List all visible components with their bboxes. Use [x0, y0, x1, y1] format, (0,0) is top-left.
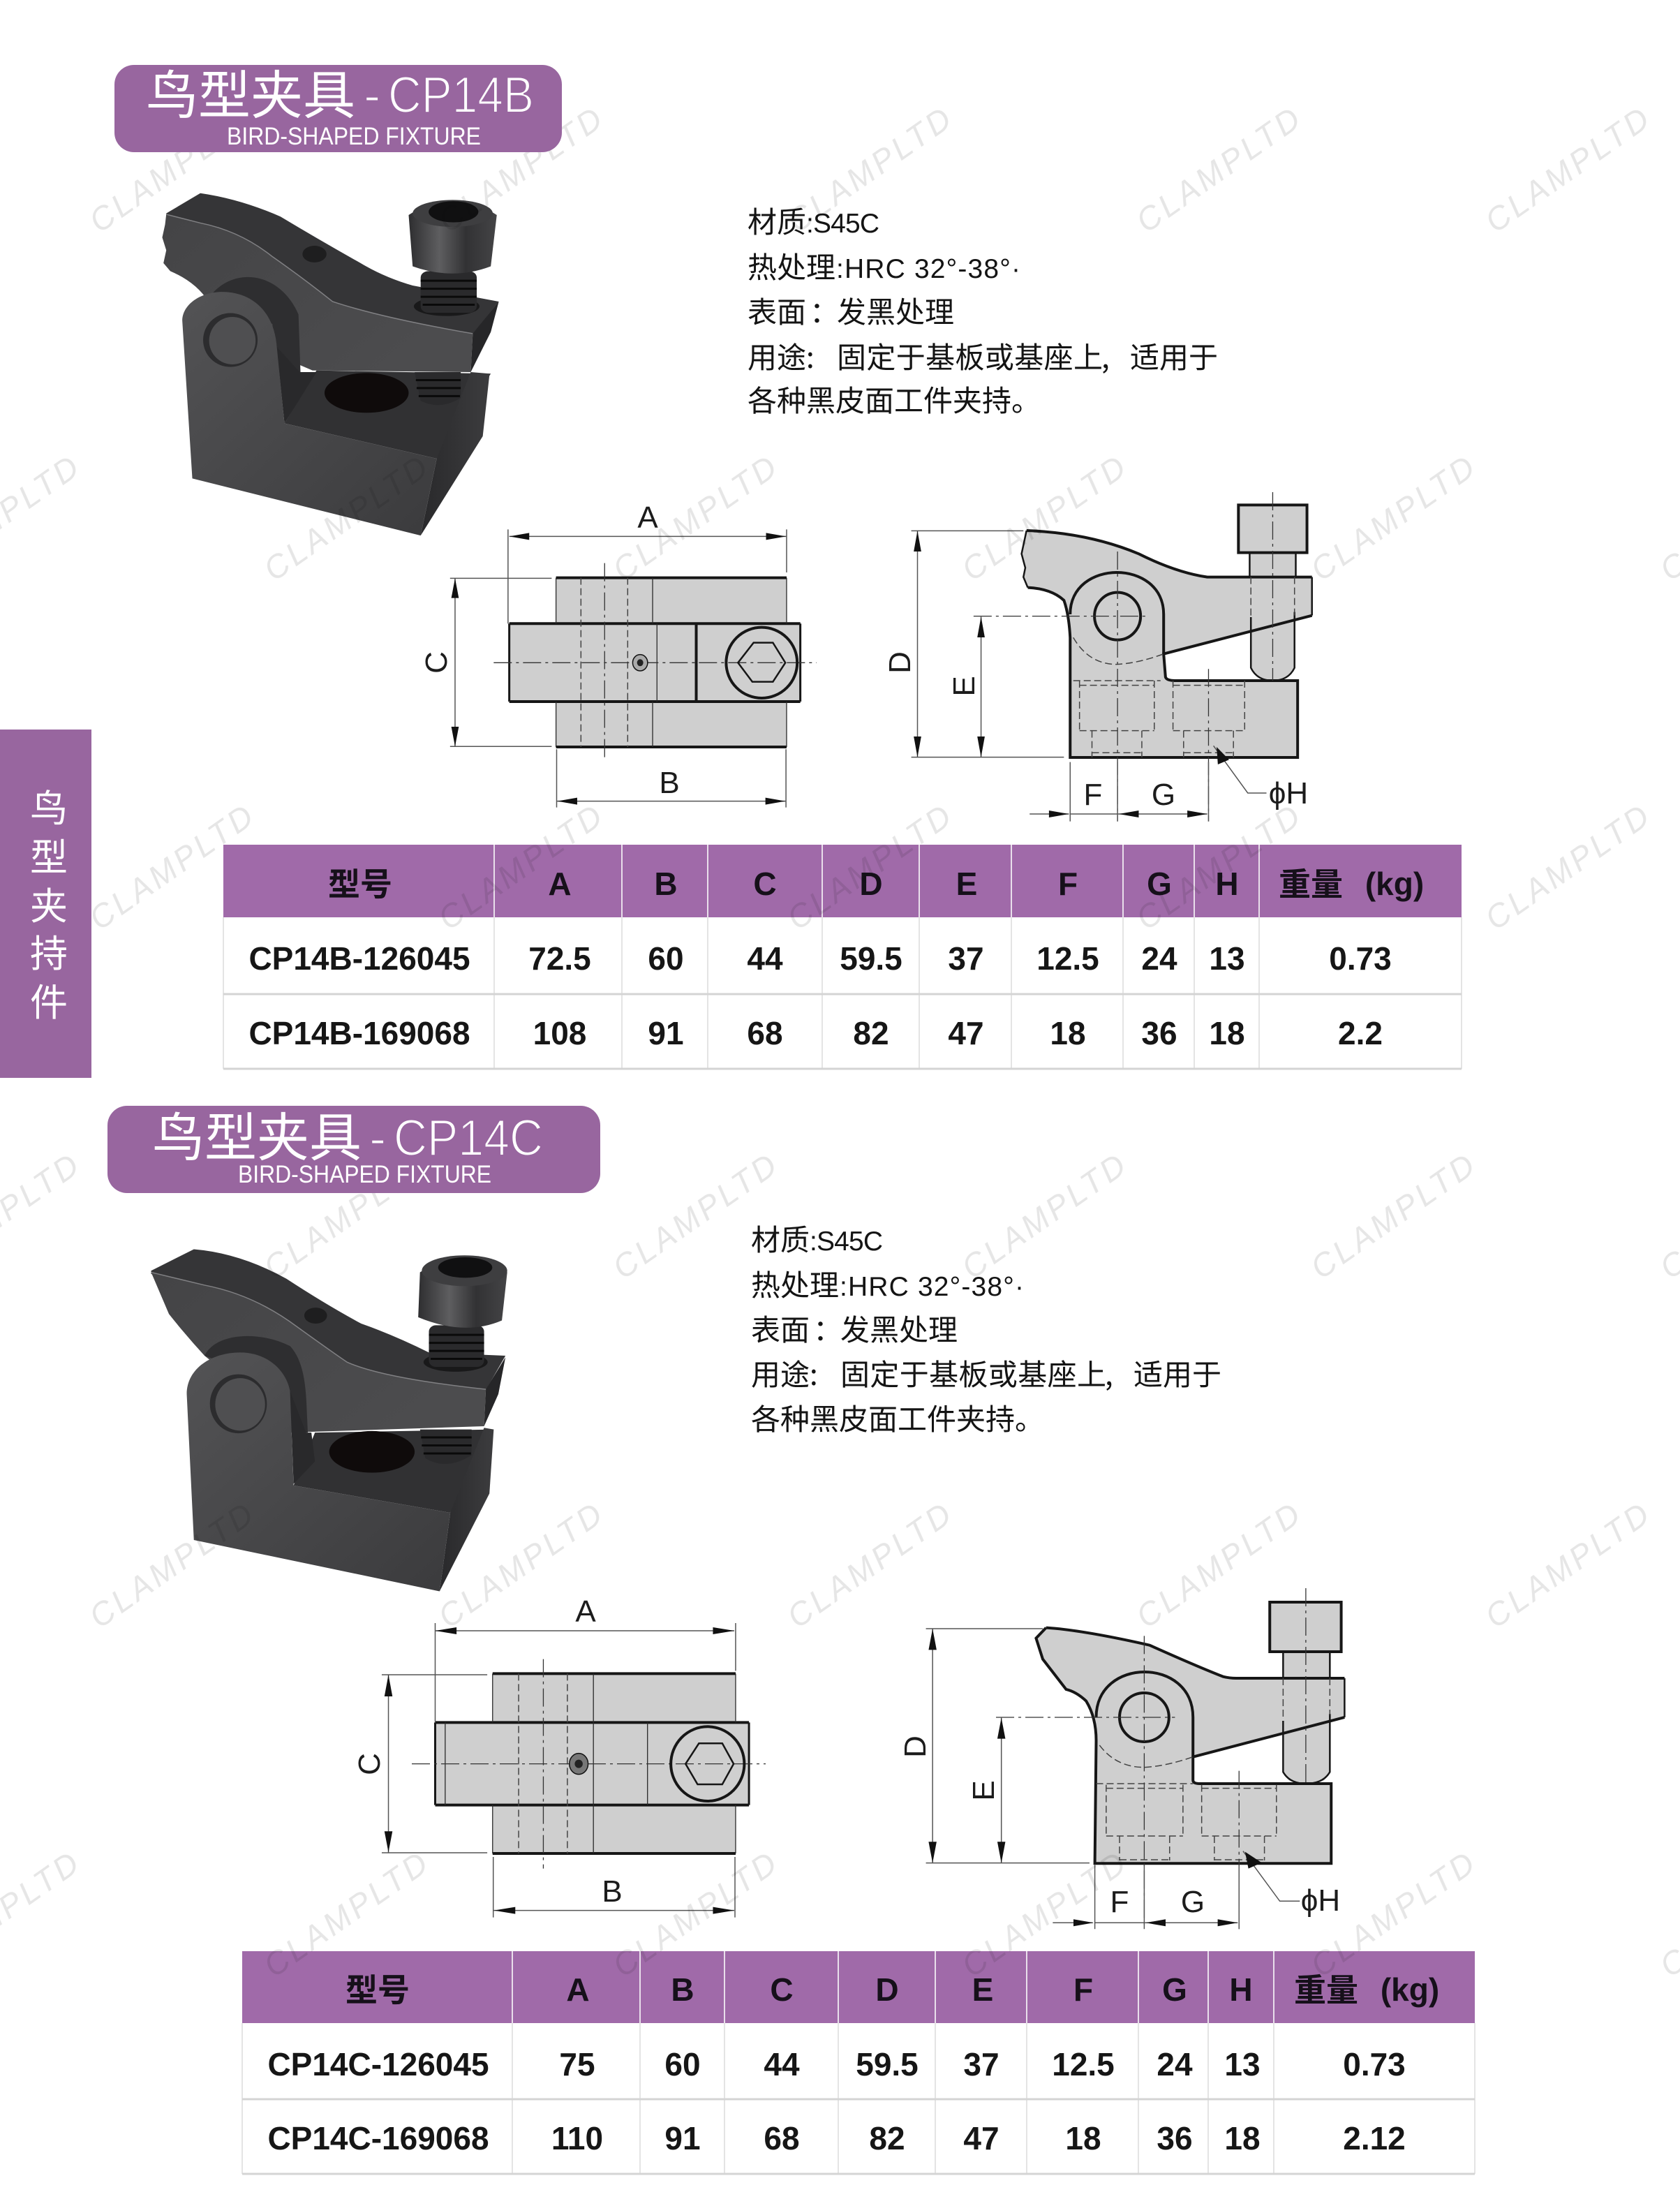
specification text: CP14B: [748, 199, 1218, 420]
table row: CP14B-126045: CP14B-126045: [248, 940, 470, 977]
table row: CP14B-126045: [248, 940, 1392, 977]
spec table: CP14C: [242, 1951, 1475, 2174]
title banner: CP14C: [107, 1095, 600, 1193]
technical drawing: CP14C side view: [926, 1588, 1344, 1929]
specification text: CP14C: ,: [1105, 1352, 1113, 1394]
specification text: CP14C: 材质: [751, 1217, 810, 1259]
watermark pattern: CLAMPLTD: [1478, 98, 1658, 239]
specification text: CP14C: :HRC 32°-38°·: [840, 1272, 1024, 1302]
table header row: B: [671, 1971, 694, 2008]
watermark pattern: CLAMPLTD: [1304, 447, 1484, 588]
side tab: category label: 鸟: [30, 778, 68, 833]
dimension labels: CP14B top view: [419, 501, 680, 800]
table header row: 型号: [345, 1972, 410, 2008]
table header row: H: [1229, 1971, 1253, 2008]
side tab: category label: [0, 730, 91, 1078]
watermark pattern: CLAMPLTD: [606, 447, 786, 588]
table row: CP14B-126045: 0.73: [1329, 940, 1392, 977]
table header row: 重量: [1294, 1972, 1358, 2008]
title banner: CP14B: -: [364, 67, 380, 124]
table header row: G: [1162, 1971, 1187, 2008]
table row: CP14B-126045: 12.5: [1036, 940, 1099, 977]
product photo: CP14C clamp: [151, 1249, 507, 1591]
watermark pattern: CLAMPLTD: [1129, 1494, 1309, 1635]
watermark pattern: CLAMPLTD: [257, 1843, 437, 1984]
table row: CP14B-169068: 18: [1209, 1015, 1245, 1051]
table row: CP14B-126045: 60: [648, 940, 684, 977]
specification text: CP14C: 表面: [751, 1307, 810, 1349]
watermark pattern: CLAMPLTD: [431, 1494, 611, 1635]
table row: CP14C-126045: 59.5: [856, 2046, 919, 2082]
specification text: CP14B: :HRC 32°-38°·: [836, 254, 1020, 284]
title banner: CP14B: BIRD-SHAPED FIXTURE: [227, 123, 481, 150]
specification text: CP14B: ,: [1101, 334, 1110, 377]
title banner: CP14C: CP14C: [394, 1110, 543, 1167]
watermark pattern: CLAMPLTD: [1478, 796, 1658, 937]
table row: CP14C-126045: 37: [963, 2046, 999, 2082]
technical drawing: CP14C top view: [382, 1623, 766, 1918]
watermark pattern: CLAMPLTD: [606, 1843, 786, 1984]
title banner: CP14B: 鸟型夹具: [146, 53, 355, 129]
table header row: 型号: [328, 866, 392, 903]
table row: CP14C-169068: 47: [963, 2120, 999, 2156]
watermark pattern: CLAMPLTD: [82, 98, 262, 239]
watermark pattern: CLAMPLTD: [780, 98, 960, 239]
table row: CP14B-169068: CP14B-169068: [248, 1015, 470, 1051]
table row: CP14B-126045: 24: [1141, 940, 1177, 977]
table row: CP14B-169068: 108: [533, 1015, 586, 1051]
table header row: C: [770, 1971, 794, 2008]
table header row: (kg): [1381, 1971, 1439, 2008]
title banner: CP14C: -: [369, 1110, 386, 1167]
table row: CP14C-169068: 18: [1224, 2120, 1261, 2156]
table row: CP14C-169068: CP14C-169068: [267, 2120, 489, 2156]
spec table: CP14B: [223, 845, 1462, 1069]
specification text: CP14B: 用途:: [748, 334, 815, 377]
watermark pattern: CLAMPLTD: [780, 796, 960, 937]
watermark pattern: CLAMPLTD: [431, 98, 611, 239]
watermark pattern: CLAMPLTD: [82, 1494, 262, 1635]
watermark pattern: CLAMPLTD: [82, 796, 262, 937]
table row: CP14C-126045: CP14C-126045: [267, 2046, 489, 2082]
specification text: CP14C: 热处理: [751, 1262, 839, 1305]
dimension labels: CP14C top view: B: [602, 1874, 623, 1909]
dimension labels: CP14B side view: ϕH: [1269, 776, 1308, 810]
table row: CP14C-126045: 75: [559, 2046, 595, 2082]
table row: CP14B-126045: 72.5: [528, 940, 591, 977]
dimension labels: CP14B side view: D: [883, 651, 917, 674]
table header row: [223, 845, 1462, 917]
technical drawing: CP14B top view: [450, 529, 817, 808]
table row: CP14B-126045: 13: [1209, 940, 1245, 977]
dimension labels: CP14B top view: B: [659, 766, 680, 800]
table header row: (kg): [1365, 866, 1424, 902]
watermark pattern: CLAMPLTD: [955, 1145, 1135, 1286]
table header row: 重量: [1279, 866, 1343, 903]
table header row: D: [859, 866, 883, 902]
table row: CP14C-169068: 68: [764, 2120, 800, 2156]
dimension labels: CP14B side view: F: [1084, 778, 1102, 812]
table header row: D: [875, 1971, 899, 2008]
dimension labels: CP14B side view: E: [947, 676, 981, 697]
watermark pattern: CLAMPLTD: [1129, 98, 1309, 239]
table header row: C: [753, 866, 777, 902]
side tab: category label: 持: [30, 923, 68, 978]
side tab: category label: 夹: [30, 875, 68, 931]
side tab: category label: 件: [30, 972, 68, 1027]
title banner: CP14B: [114, 53, 562, 152]
dimension labels: CP14C side view: [898, 1735, 1340, 1919]
table row: CP14C-126045: 13: [1224, 2046, 1261, 2082]
specification text: CP14B: 热处理: [748, 244, 835, 287]
table header row: A: [566, 1971, 590, 2008]
table row: CP14B-169068: 47: [948, 1015, 984, 1051]
specification text: CP14B: 固定于基板或基座上: [837, 334, 1103, 377]
watermark pattern: CLAMPLTD: [955, 447, 1135, 588]
table row: CP14C-126045: [267, 2046, 1406, 2082]
dimension labels: CP14B side view: G: [1152, 778, 1175, 812]
watermark pattern: CLAMPLTD: [431, 796, 611, 937]
dimension labels: CP14C side view: D: [898, 1735, 932, 1758]
table row: CP14C-169068: 91: [664, 2120, 701, 2156]
dimension labels: CP14C top view: [352, 1594, 623, 1909]
table header row: H: [1215, 866, 1239, 902]
title banner: CP14C: BIRD-SHAPED FIXTURE: [238, 1161, 491, 1188]
dimension labels: CP14B top view: C: [419, 651, 454, 674]
table header row: F: [1073, 1971, 1093, 2008]
product photo: CP14B clamp: [162, 193, 499, 535]
watermark pattern: CLAMPLTD: [257, 447, 437, 588]
specification text: CP14C: 固定于基板或基座上: [840, 1352, 1106, 1394]
specification text: CP14B: 表面: [748, 289, 806, 332]
dimension labels: CP14C top view: A: [575, 1594, 596, 1629]
table row: CP14B-126045: 37: [948, 940, 984, 977]
title banner: CP14B: CP14B: [388, 67, 534, 124]
table header row: E: [972, 1971, 993, 2008]
table row: CP14C-169068: 2.12: [1343, 2120, 1406, 2156]
table row: CP14B-169068: 18: [1050, 1015, 1086, 1051]
dimension labels: CP14B top view: A: [637, 501, 658, 535]
table row: CP14C-169068: 82: [869, 2120, 905, 2156]
watermark pattern: CLAMPLTD: [1478, 1494, 1658, 1635]
dimension labels: CP14C side view: E: [967, 1780, 1001, 1801]
watermark pattern: CLAMPLTD: [257, 1145, 437, 1286]
table header row: [242, 1951, 1475, 2023]
specification text: CP14B: ：: [810, 289, 839, 332]
table row: CP14B-169068: 82: [853, 1015, 889, 1051]
table row: CP14C-126045: 24: [1157, 2046, 1193, 2082]
table row: CP14C-169068: 110: [551, 2120, 603, 2156]
table header row: B: [654, 866, 678, 902]
watermark pattern: CLAMPLTD: [780, 1494, 960, 1635]
table row: CP14B-169068: 68: [747, 1015, 783, 1051]
table row: CP14C-126045: 12.5: [1052, 2046, 1115, 2082]
table row: CP14C-126045: 44: [764, 2046, 800, 2082]
specification text: CP14B: 适用于: [1130, 334, 1218, 377]
table row: CP14C-169068: [267, 2120, 1406, 2156]
watermark pattern: CLAMPLTD: [955, 1843, 1135, 1984]
title banner: CP14C: 鸟型夹具: [152, 1095, 362, 1171]
table row: CP14B-126045: 44: [747, 940, 783, 977]
side tab: category label: 型: [30, 827, 68, 882]
specification text: CP14C: 用途:: [751, 1352, 818, 1394]
dimension labels: CP14C side view: G: [1181, 1885, 1205, 1919]
specification text: CP14C: [751, 1217, 1221, 1439]
specification text: CP14B: :S45C: [806, 209, 879, 239]
watermark pattern: CLAMPLTD: [606, 1145, 786, 1286]
table header row: E: [956, 866, 977, 902]
table row: CP14C-169068: 36: [1157, 2120, 1193, 2156]
dimension labels: CP14C side view: ϕH: [1301, 1883, 1340, 1918]
specification text: CP14B: 发黑处理: [837, 289, 954, 332]
table header row: F: [1058, 866, 1078, 902]
table row: CP14B-169068: 2.2: [1338, 1015, 1383, 1051]
dimension labels: CP14C side view: F: [1110, 1885, 1129, 1919]
table row: CP14C-126045: 0.73: [1343, 2046, 1406, 2082]
dimension labels: CP14B side view: [883, 651, 1308, 812]
table row: CP14B-169068: 36: [1141, 1015, 1177, 1051]
table row: CP14B-169068: 91: [648, 1015, 684, 1051]
table row: CP14B-126045: 59.5: [840, 940, 902, 977]
watermark pattern: CLAMPLTD: [1304, 1843, 1484, 1984]
technical drawing: CP14B side view: [912, 492, 1312, 822]
table row: CP14B-169068: [248, 1015, 1383, 1051]
watermark pattern: CLAMPLTD: [1129, 796, 1309, 937]
specification text: CP14B: 材质: [748, 199, 806, 242]
specification text: CP14C: 发黑处理: [840, 1307, 958, 1349]
specification text: CP14C: :S45C: [810, 1227, 883, 1257]
dimension labels: CP14C top view: C: [352, 1753, 387, 1775]
table row: CP14C-169068: 18: [1065, 2120, 1101, 2156]
table header row: G: [1147, 866, 1172, 902]
specification text: CP14C: 各种黑皮面工件夹持。: [751, 1396, 1044, 1439]
table header row: A: [548, 866, 572, 902]
specification text: CP14C: ：: [813, 1307, 842, 1349]
watermark pattern: CLAMPLTD: [1304, 1145, 1484, 1286]
table row: CP14C-126045: 60: [664, 2046, 701, 2082]
specification text: CP14C: 适用于: [1133, 1352, 1221, 1394]
specification text: CP14B: 各种黑皮面工件夹持。: [748, 378, 1041, 420]
